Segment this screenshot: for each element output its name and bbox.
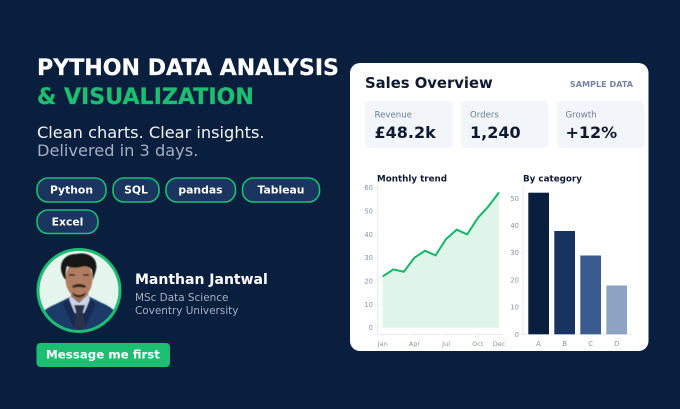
panel: sales overview xyxy=(350,63,648,351)
y axis labels: 40 xyxy=(510,222,519,230)
stat card: revenue xyxy=(365,101,453,148)
bar A xyxy=(528,193,549,334)
y axis labels: 50 xyxy=(364,208,373,216)
x axis labels: B xyxy=(562,340,567,348)
pill: Excel xyxy=(37,210,98,234)
y axis labels: 0 xyxy=(369,324,373,332)
x axis labels: D xyxy=(614,340,619,348)
chart title: Monthly trend xyxy=(377,174,447,184)
y axis labels: 20 xyxy=(510,276,519,284)
y axis labels: 10 xyxy=(364,301,373,309)
title: PYTHON DATA ANALYSIS xyxy=(37,55,339,81)
suit xyxy=(44,296,114,330)
y axis labels: 30 xyxy=(510,249,519,257)
pill: Excel: Excel xyxy=(52,216,83,228)
presenter name: Manthan Jantwal xyxy=(135,272,268,288)
stat card: orders: Orders xyxy=(470,110,499,120)
trend line xyxy=(383,192,499,276)
y axis labels: 50 xyxy=(510,195,519,203)
pill: SQL xyxy=(113,178,159,202)
stat card: revenue: £48.2k xyxy=(374,123,436,142)
hair xyxy=(61,253,96,280)
x axis labels: C xyxy=(588,340,593,348)
stat card: growth: Growth xyxy=(566,110,597,120)
y axis labels: 0 xyxy=(515,331,519,339)
y axis labels xyxy=(510,195,519,339)
line chart: monthly trend xyxy=(364,174,506,348)
skill pills xyxy=(37,178,320,234)
x axis labels: A xyxy=(536,340,541,348)
x axis labels xyxy=(536,340,619,348)
sample data label: SAMPLE DATA xyxy=(570,79,634,89)
neck xyxy=(70,292,89,303)
stat card: orders: 1,240 xyxy=(470,123,521,142)
y axis labels: 20 xyxy=(364,278,373,286)
presenter credentials: Coventry University xyxy=(135,305,238,317)
pill: Tableau xyxy=(242,178,320,202)
stat card: orders xyxy=(461,101,548,148)
x axis labels: Jan xyxy=(377,340,388,348)
lapels xyxy=(63,299,96,329)
y axis labels xyxy=(364,184,373,332)
pill: SQL: SQL xyxy=(124,184,148,196)
bar C xyxy=(580,256,601,334)
axes xyxy=(520,186,632,334)
x axis labels: Jul xyxy=(441,340,450,348)
presenter credentials: MSc Data Science xyxy=(135,292,228,304)
axes xyxy=(375,186,503,337)
shirt xyxy=(69,294,90,313)
chart title: By category xyxy=(523,174,582,184)
pill: Python: Python xyxy=(50,184,93,196)
x axis labels xyxy=(377,340,506,348)
area fill xyxy=(383,192,499,328)
button: message me first xyxy=(36,343,170,367)
tie xyxy=(74,305,85,333)
pill: pandas xyxy=(166,178,236,202)
y axis labels: 60 xyxy=(364,184,373,192)
stat card: growth xyxy=(557,101,644,148)
y axis labels: 30 xyxy=(364,254,373,262)
presenter credentials xyxy=(135,292,238,317)
pill: pandas: pandas xyxy=(178,184,223,196)
x axis labels: Dec xyxy=(493,340,506,348)
face xyxy=(65,266,94,296)
button: message me first: Message me first xyxy=(46,348,160,362)
moustache and beard xyxy=(72,284,86,298)
bar D xyxy=(606,286,627,334)
stat card: growth: +12% xyxy=(566,123,617,142)
stat card: revenue: Revenue xyxy=(374,110,412,120)
x axis labels: Oct xyxy=(472,340,484,348)
tagline xyxy=(37,123,265,160)
bar B xyxy=(554,231,575,334)
tagline: Clean charts. Clear insights. xyxy=(37,123,265,142)
y axis labels: 10 xyxy=(510,304,519,312)
profile photo xyxy=(38,250,120,335)
pill: Tableau: Tableau xyxy=(258,184,304,196)
eyes xyxy=(69,274,89,276)
tagline: Delivered in 3 days. xyxy=(37,141,198,160)
y axis labels: 40 xyxy=(364,231,373,239)
bar chart: by category xyxy=(510,174,632,348)
title: & VISUALIZATION xyxy=(37,84,254,110)
x axis labels: Apr xyxy=(409,340,420,348)
title xyxy=(37,55,339,110)
panel heading: Sales Overview xyxy=(365,75,493,92)
pill: Python xyxy=(37,178,106,202)
